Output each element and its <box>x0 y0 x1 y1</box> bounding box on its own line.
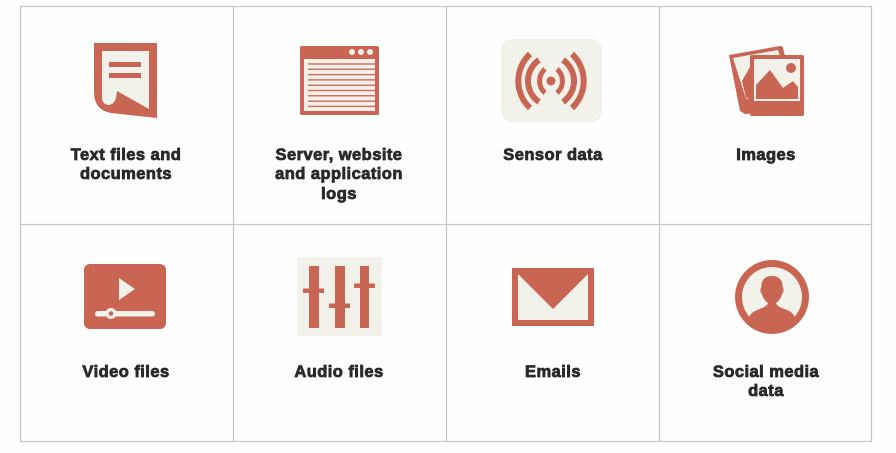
panel: text files and documents <box>71 43 181 183</box>
label: logs: and application <box>275 165 403 183</box>
panel: emails <box>512 268 594 381</box>
icon: profile avatar <box>735 260 809 334</box>
label: logs: Server, website <box>276 146 402 164</box>
label: audio files: Audio files <box>294 363 384 381</box>
panel: audio files <box>294 257 384 381</box>
panel: images <box>729 46 804 164</box>
label: logs: logs <box>321 185 357 203</box>
icon: sensor signal <box>501 39 602 122</box>
icon: document <box>94 43 157 118</box>
panel: logs <box>275 46 403 203</box>
label: emails: Emails <box>525 363 581 381</box>
panel: social media data <box>713 260 820 400</box>
label: sensor data: Sensor data <box>503 146 603 164</box>
label: social media data: Social media <box>713 363 819 381</box>
label: social media data: data <box>748 382 784 400</box>
icon: browser window <box>300 46 379 115</box>
label: text files: Text files and <box>71 146 181 164</box>
label: text files: documents <box>80 165 172 183</box>
icon: photos <box>729 46 804 116</box>
icon: video player <box>84 264 166 329</box>
icon: mixer sliders <box>297 257 382 336</box>
label: video files: Video files <box>82 363 170 381</box>
icon: envelope <box>512 268 594 326</box>
panel: video files <box>82 264 170 381</box>
panel: sensor data <box>501 39 603 164</box>
label: images: Images <box>736 146 796 164</box>
